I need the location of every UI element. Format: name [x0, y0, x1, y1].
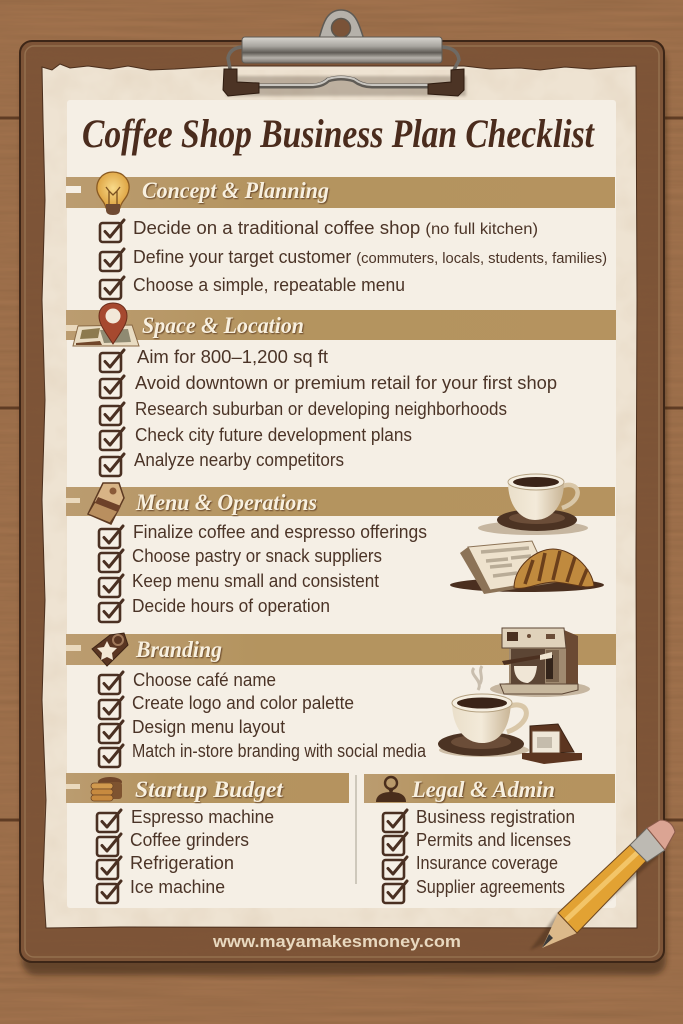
section: Legal & Admin — [364, 774, 615, 903]
section: Branding — [66, 633, 616, 767]
heading: Concept & Planning — [142, 178, 329, 203]
section: Menu & Operations — [66, 483, 615, 622]
heading: Legal & Admin — [411, 777, 555, 802]
section: Concept & Planning — [66, 172, 615, 299]
checklist: Ice machine — [130, 877, 225, 897]
heading: Branding — [135, 637, 222, 662]
tape highlight — [66, 784, 80, 789]
icon: pencil — [530, 820, 675, 950]
section: Space & Location — [66, 303, 616, 476]
heading: Space & Location — [142, 313, 304, 338]
tape highlight — [66, 645, 81, 651]
tape highlight — [66, 325, 78, 331]
checklist: Decide hours of operation — [132, 596, 330, 616]
icon: person — [376, 777, 406, 802]
checklist — [100, 347, 557, 476]
inner paper panel — [67, 100, 616, 908]
section: Startup Budget — [66, 773, 349, 903]
checklist: Define your target customer (commuters, locals, students, families) — [133, 247, 607, 267]
icon: star tag — [92, 633, 128, 666]
checklist: Insurance coverage — [416, 853, 558, 873]
checklist: Keep menu small and consistent — [132, 571, 379, 591]
checklist: Choose a simple, repeatable menu — [133, 275, 405, 295]
tape highlight — [66, 186, 81, 193]
checklist — [99, 522, 427, 622]
checklist: Match in-store branding with social media — [132, 741, 427, 761]
icon: light bulb — [97, 172, 129, 215]
title: Coffee Shop Business Plan Checklist — [82, 111, 596, 156]
checklist: Supplier agreements — [416, 877, 565, 897]
checklist — [99, 670, 427, 767]
illustration: coffee cup on saucer — [478, 474, 588, 535]
band — [66, 487, 615, 516]
illustration: open book and croissant — [450, 541, 604, 594]
checklist: Refrigeration — [130, 853, 234, 873]
illustration: coffee cup and table sign — [438, 666, 582, 764]
icon: coin stack — [91, 777, 122, 801]
checklist: Business registration — [416, 807, 575, 827]
icon: menu tag — [88, 483, 124, 524]
checklist: Choose pastry or snack suppliers — [132, 546, 382, 566]
checklist: Permits and licenses — [416, 830, 571, 850]
checklist — [383, 807, 575, 903]
checklist — [97, 807, 274, 903]
band — [364, 774, 615, 803]
band — [66, 773, 349, 803]
checklist: Design menu layout — [132, 717, 285, 737]
band — [66, 310, 616, 340]
tape highlight — [66, 498, 80, 503]
checklist: Aim for 800–1,200 sq ft — [137, 347, 328, 367]
checklist — [100, 218, 607, 299]
checklist: Decide on a traditional coffee shop (no full kitchen) — [133, 218, 538, 238]
checklist: Research suburban or developing neighborhoods — [135, 399, 507, 419]
checklist: Avoid downtown or premium retail for your first shop — [135, 373, 557, 393]
paper sheet — [42, 64, 637, 928]
checklist: Coffee grinders — [130, 830, 249, 850]
column divider — [355, 775, 357, 884]
checklist: Finalize coffee and espresso offerings — [133, 522, 427, 542]
icon: map pin — [73, 303, 139, 346]
clipboard clip — [223, 10, 466, 96]
heading: Menu & Operations — [135, 490, 317, 515]
checklist: Create logo and color palette — [132, 693, 354, 713]
illustration: espresso machine — [490, 628, 590, 697]
checklist: Analyze nearby competitors — [134, 450, 344, 470]
band — [66, 177, 615, 208]
checklist: Choose café name — [133, 670, 276, 690]
checklist: Check city future development plans — [135, 425, 412, 445]
band — [66, 634, 616, 665]
heading: Startup Budget — [135, 777, 284, 802]
website footer: www.mayamakesmoney.com — [212, 932, 461, 951]
checklist: Espresso machine — [131, 807, 274, 827]
